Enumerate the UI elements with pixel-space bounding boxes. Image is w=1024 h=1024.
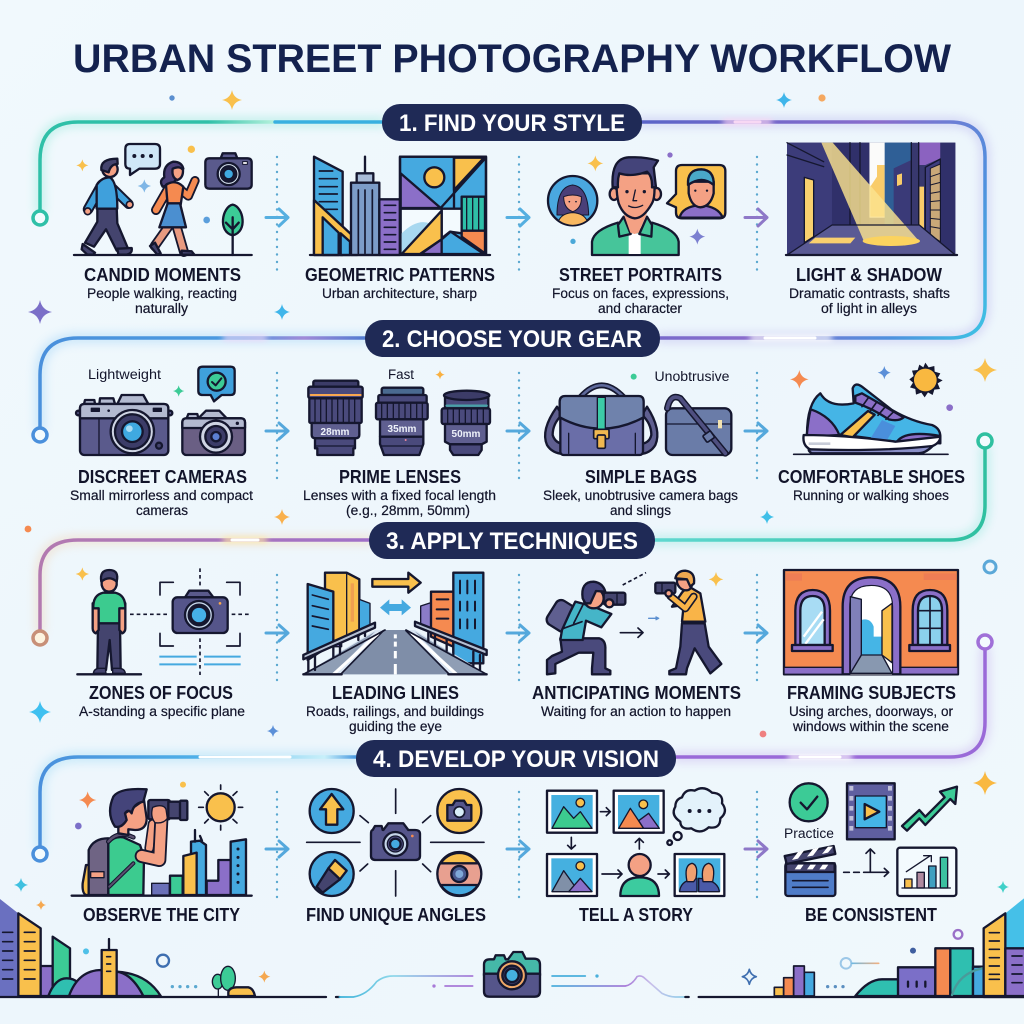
camera — [205, 153, 252, 189]
row 2 captions: Running or walking shoes — [793, 488, 949, 503]
label: unobtrusive: Unobtrusive — [654, 369, 730, 384]
heading pill: 2. choose your gear: 2. CHOOSE YOUR GEAR — [382, 326, 642, 353]
eye level circle — [437, 852, 481, 896]
row 1 captions: and character — [598, 301, 682, 316]
icon: observe the city — [72, 782, 252, 896]
row 4 captions: FIND UNIQUE ANGLES — [306, 905, 486, 925]
row 3 captions: FRAMING SUBJECTS — [787, 683, 956, 703]
icon: geometric patterns — [310, 157, 490, 255]
heading pill: 3. apply techniques — [369, 522, 655, 559]
heading pill: 1. find your style — [382, 104, 642, 141]
icon: anticipating moments — [544, 571, 723, 674]
row 1 captions: Focus on faces, expressions, — [552, 286, 729, 301]
film strip — [847, 783, 895, 839]
dotted column dividers — [277, 157, 757, 902]
lens focal length labels — [321, 424, 481, 440]
icon: candid moments — [74, 144, 252, 255]
row 2 captions: Lenses with a fixed focal length — [303, 488, 496, 503]
person — [620, 854, 659, 896]
workflow connector lines — [33, 122, 992, 861]
sun — [199, 785, 243, 830]
central arch door — [843, 577, 900, 674]
standing photographer — [655, 571, 721, 674]
lens 50mm — [442, 391, 490, 455]
icon: framing subjects — [784, 570, 958, 674]
icon: discreet cameras — [76, 367, 245, 455]
lens 28mm — [308, 381, 363, 455]
row 3 captions: ANTICIPATING MOMENTS — [532, 683, 741, 703]
skyline: bottom left — [0, 899, 473, 997]
row 3 captions: ZONES OF FOCUS — [89, 683, 233, 703]
row 3 captions: Waiting for an action to happen — [541, 704, 731, 719]
up arrow circle — [310, 789, 354, 833]
row 1 captions: naturally — [135, 301, 188, 316]
skyline: bottom right — [552, 898, 1024, 997]
row 1 captions: STREET PORTRAITS — [559, 265, 722, 285]
icon: street portraits — [548, 152, 725, 255]
row 2 captions: Small mirrorless and compact — [70, 488, 253, 503]
row 1 captions — [84, 265, 950, 316]
camera — [173, 591, 228, 633]
sneaker — [803, 385, 940, 453]
decorative sparkles and dots — [14, 90, 1009, 910]
woman portrait — [548, 176, 597, 225]
row 1 captions: Urban architecture, sharp — [322, 286, 477, 301]
icon: comfortable shoes — [790, 363, 953, 454]
sun — [909, 363, 943, 397]
row 3 captions: guiding the eye — [349, 719, 442, 734]
icon: zones of focus — [76, 567, 252, 675]
tree — [223, 205, 243, 255]
clapperboard — [785, 846, 835, 896]
row 2 captions: PRIME LENSES — [339, 467, 461, 487]
photo frame 1 — [547, 791, 597, 833]
lens 35mm — [376, 388, 428, 455]
thought bubble — [667, 788, 725, 845]
road — [303, 630, 487, 674]
photographer — [83, 789, 187, 895]
heading pill: 4. develop your vision — [356, 740, 676, 777]
lens focal length labels: 28mm — [321, 427, 350, 438]
row 3 captions — [79, 683, 956, 734]
row 1 captions: of light in alleys — [821, 301, 917, 316]
heading pill: 4. develop your vision: 4. DEVELOP YOUR VISION — [373, 746, 659, 773]
row 4 captions: TELL A STORY — [579, 905, 693, 925]
row 1 captions: CANDID MOMENTS — [84, 265, 241, 285]
yellow arrow — [372, 573, 421, 593]
row 1 captions: LIGHT & SHADOW — [796, 265, 942, 285]
center camera — [371, 823, 420, 860]
practice check — [790, 783, 828, 821]
label: fast: Fast — [388, 367, 414, 382]
kneeling photographer — [544, 582, 625, 674]
row 4 captions: BE CONSISTENT — [805, 905, 937, 925]
icon: find unique angles — [307, 789, 484, 896]
story arrows — [568, 808, 669, 878]
right arched window — [909, 590, 950, 651]
geometric mosaic — [400, 157, 486, 254]
icon: simple bags — [545, 374, 731, 455]
skyline — [152, 830, 246, 895]
large mirrorless camera — [76, 395, 172, 455]
row 2 captions — [70, 467, 965, 518]
focus plane lines — [159, 657, 241, 664]
label: practice: Practice — [784, 826, 834, 841]
wide lens circle — [310, 852, 354, 896]
row 2 captions: (e.g., 28mm, 50mm) — [346, 503, 470, 518]
row 2 captions: and slings — [610, 503, 671, 518]
title: URBAN STREET PHOTOGRAPHY WORKFLOW — [73, 37, 951, 81]
row 1 captions: People walking, reacting — [87, 286, 237, 301]
dashed focus lines — [130, 568, 252, 675]
row 2 captions: SIMPLE BAGS — [585, 467, 697, 487]
right railing — [415, 622, 487, 670]
woman walking — [150, 162, 195, 255]
row 3 captions: LEADING LINES — [332, 683, 459, 703]
row 3 captions: A-standing a specific plane — [79, 704, 245, 719]
messenger bag — [545, 385, 657, 455]
growth arrow — [902, 787, 957, 831]
row 4 captions — [83, 905, 937, 925]
camera circle — [437, 789, 481, 833]
icon: be consistent — [785, 783, 957, 896]
lens focal length labels: 50mm — [452, 429, 481, 440]
sling bag — [666, 397, 731, 455]
row 3 captions: windows within the scene — [792, 719, 949, 734]
row 2 captions: COMFORTABLE SHOES — [778, 467, 965, 487]
blue double arrow — [380, 599, 411, 615]
photo frame 3 — [547, 854, 597, 896]
speech bubble portrait — [667, 165, 725, 218]
row 1 captions: GEOMETRIC PATTERNS — [305, 265, 495, 285]
lens focal length labels: 35mm — [388, 424, 417, 435]
row 1 captions: Dramatic contrasts, shafts — [789, 286, 950, 301]
row 2 captions: DISCREET CAMERAS — [78, 467, 247, 487]
compact camera — [182, 411, 245, 455]
icon: center camera at bottom — [484, 952, 540, 997]
icon: leading lines street — [303, 573, 487, 674]
man portrait — [592, 157, 679, 255]
heading pill: 2. choose your gear — [365, 320, 660, 357]
person standing — [93, 570, 125, 673]
heading pill: 3. apply techniques: 3. APPLY TECHNIQUES — [386, 528, 638, 555]
speech bubble — [125, 144, 160, 175]
photo frame 4 — [675, 854, 724, 896]
label: lightweight: Lightweight — [88, 367, 161, 382]
icon: light and shadow alley — [786, 143, 957, 255]
man walking — [82, 159, 133, 255]
icon: tell a story — [547, 788, 725, 896]
focus brackets — [160, 582, 240, 646]
row 2 captions: Sleek, unobtrusive camera bags — [543, 488, 738, 503]
row 2 captions: cameras — [136, 503, 188, 518]
branching arrows — [844, 849, 889, 876]
flow arrows between columns — [266, 209, 767, 857]
row 3 captions: Roads, railings, and buildings — [306, 704, 484, 719]
left railing — [303, 623, 375, 672]
row 3 captions: Using arches, doorways, or — [789, 704, 953, 719]
row 4 captions: OBSERVE THE CITY — [83, 905, 240, 925]
check badge — [198, 367, 235, 401]
left arched window — [792, 590, 833, 651]
chart — [897, 848, 956, 896]
heading pill: 1. find your style: 1. FIND YOUR STYLE — [399, 110, 625, 137]
icon: prime lenses — [308, 370, 490, 455]
trees — [212, 966, 255, 996]
photo frame 2 — [614, 791, 664, 833]
